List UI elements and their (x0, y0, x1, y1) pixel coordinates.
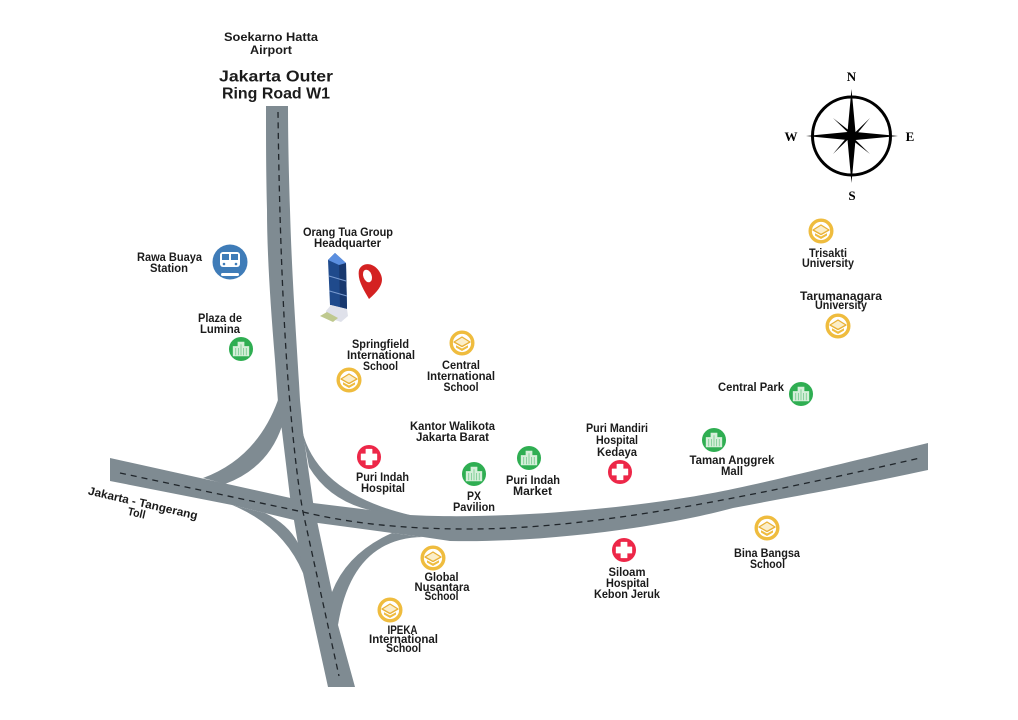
label: Rawa Buaya Station (137, 252, 203, 275)
point: Springfield International School (338, 339, 415, 391)
point: Siloam Hospital Kebon Jeruk: Kebon Jeruk (594, 589, 661, 601)
point: Plaza de Lumina: Lumina (200, 324, 241, 336)
road: south-east ramp (325, 533, 423, 625)
point: Central International School: School (444, 382, 478, 394)
point: Siloam Hospital Kebon Jeruk: Siloam (608, 567, 646, 579)
point: Puri Indah Hospital: Hospital (361, 483, 405, 495)
compass rose (784, 69, 914, 203)
point: Puri Indah Market (506, 446, 560, 498)
label: Jakarta - Tangerang Toll: Jakarta - Tangerang (87, 486, 199, 522)
point: Trisakti University: University (802, 258, 855, 270)
point: Puri Mandiri Hospital Kedaya: Kedaya (597, 447, 638, 459)
point: Puri Indah Market: Market (513, 486, 552, 498)
heading: airport (224, 32, 319, 57)
point: Bina Bangsa School (734, 517, 801, 571)
road network (110, 106, 928, 687)
point: Puri Mandiri Hospital Kedaya: Puri Mandiri (586, 423, 648, 435)
label: headquarter: Headquarter (314, 238, 382, 250)
point: Trisakti University (802, 220, 855, 270)
point: Tarumanagara University (800, 291, 883, 337)
point: Trisakti University: Trisakti (809, 248, 847, 260)
point: Puri Indah Hospital (356, 445, 409, 495)
point: Taman Anggrek Mall (690, 428, 775, 478)
point: Taman Anggrek Mall: Taman Anggrek (690, 455, 775, 467)
point: IPEKA International School (369, 599, 438, 655)
point: Plaza de Lumina: Plaza de (198, 313, 242, 325)
title: road name (219, 68, 333, 102)
point: Siloam Hospital Kebon Jeruk (594, 538, 661, 601)
point: Global Nusantara School: Nusantara (414, 582, 470, 594)
point: Siloam Hospital Kebon Jeruk: Hospital (606, 578, 649, 590)
point: Puri Indah Hospital: Puri Indah (356, 472, 409, 484)
point: Central Park: Central Park (718, 382, 785, 394)
title: road name: Jakarta Outer (219, 68, 333, 86)
road: north-west ramp (203, 400, 282, 484)
label: Rawa Buaya Station: Station (150, 263, 188, 275)
point: Global Nusantara School: Global (424, 572, 458, 584)
point: Springfield International School: Springfield (352, 339, 409, 351)
point: IPEKA International School: IPEKA (388, 625, 418, 637)
label: Jakarta - Tangerang Toll: Toll (126, 506, 147, 522)
heading: airport: Soekarno Hatta (224, 32, 319, 44)
compass rose: S (848, 188, 856, 203)
label: headquarter: Orang Tua Group (303, 227, 393, 239)
label: Kantor Walikota Jakarta Barat (410, 421, 496, 444)
point: Puri Mandiri Hospital Kedaya: Hospital (596, 435, 638, 447)
road: south-west ramp (232, 505, 308, 573)
label: Kantor Walikota Jakarta Barat: Kantor Walikota (410, 421, 496, 433)
point: Plaza de Lumina (198, 313, 253, 361)
point: PX Pavilion: Pavilion (453, 502, 495, 514)
point: IPEKA International School: School (386, 643, 421, 655)
point: Central International School: International (427, 371, 495, 383)
point: Puri Mandiri Hospital Kedaya (586, 423, 648, 484)
point: Central International School (427, 332, 495, 394)
label: Rawa Buaya Station: Rawa Buaya (137, 252, 203, 264)
point: Global Nusantara School: School (424, 591, 458, 603)
point: Puri Indah Market: Puri Indah (506, 475, 560, 487)
compass rose: E (906, 129, 914, 144)
road: Jakarta - Tangerang Toll (110, 443, 928, 541)
point: PX Pavilion: PX (467, 491, 481, 503)
point: Springfield International School: International (347, 350, 415, 362)
point: Central Park (718, 382, 813, 406)
road: Jakarta Outer Ring Road W1 (266, 106, 355, 687)
compass rose: W (784, 129, 798, 144)
point: Bina Bangsa School: School (750, 559, 785, 571)
road: north-east ramp (302, 430, 425, 525)
point: Tarumanagara University: University (815, 300, 868, 312)
compass rose: N (847, 69, 857, 84)
icon: headquarter tower (320, 253, 348, 322)
icon: train station (212, 244, 248, 280)
point: Central International School: Central (442, 360, 480, 372)
label: Kantor Walikota Jakarta Barat: Jakarta Barat (416, 432, 489, 444)
point: Springfield International School: School (363, 361, 398, 373)
point: IPEKA International School: International (369, 634, 438, 646)
point: Tarumanagara University: Tarumanagara (800, 291, 883, 303)
icon: location pin (359, 264, 382, 299)
point: Bina Bangsa School: Bina Bangsa (734, 548, 801, 560)
point: PX Pavilion (453, 462, 495, 514)
label: headquarter (303, 227, 393, 250)
point: Global Nusantara School (414, 547, 470, 603)
point: Taman Anggrek Mall: Mall (721, 466, 743, 478)
heading: airport: Airport (250, 45, 292, 57)
title: road name: Ring Road W1 (222, 86, 330, 102)
